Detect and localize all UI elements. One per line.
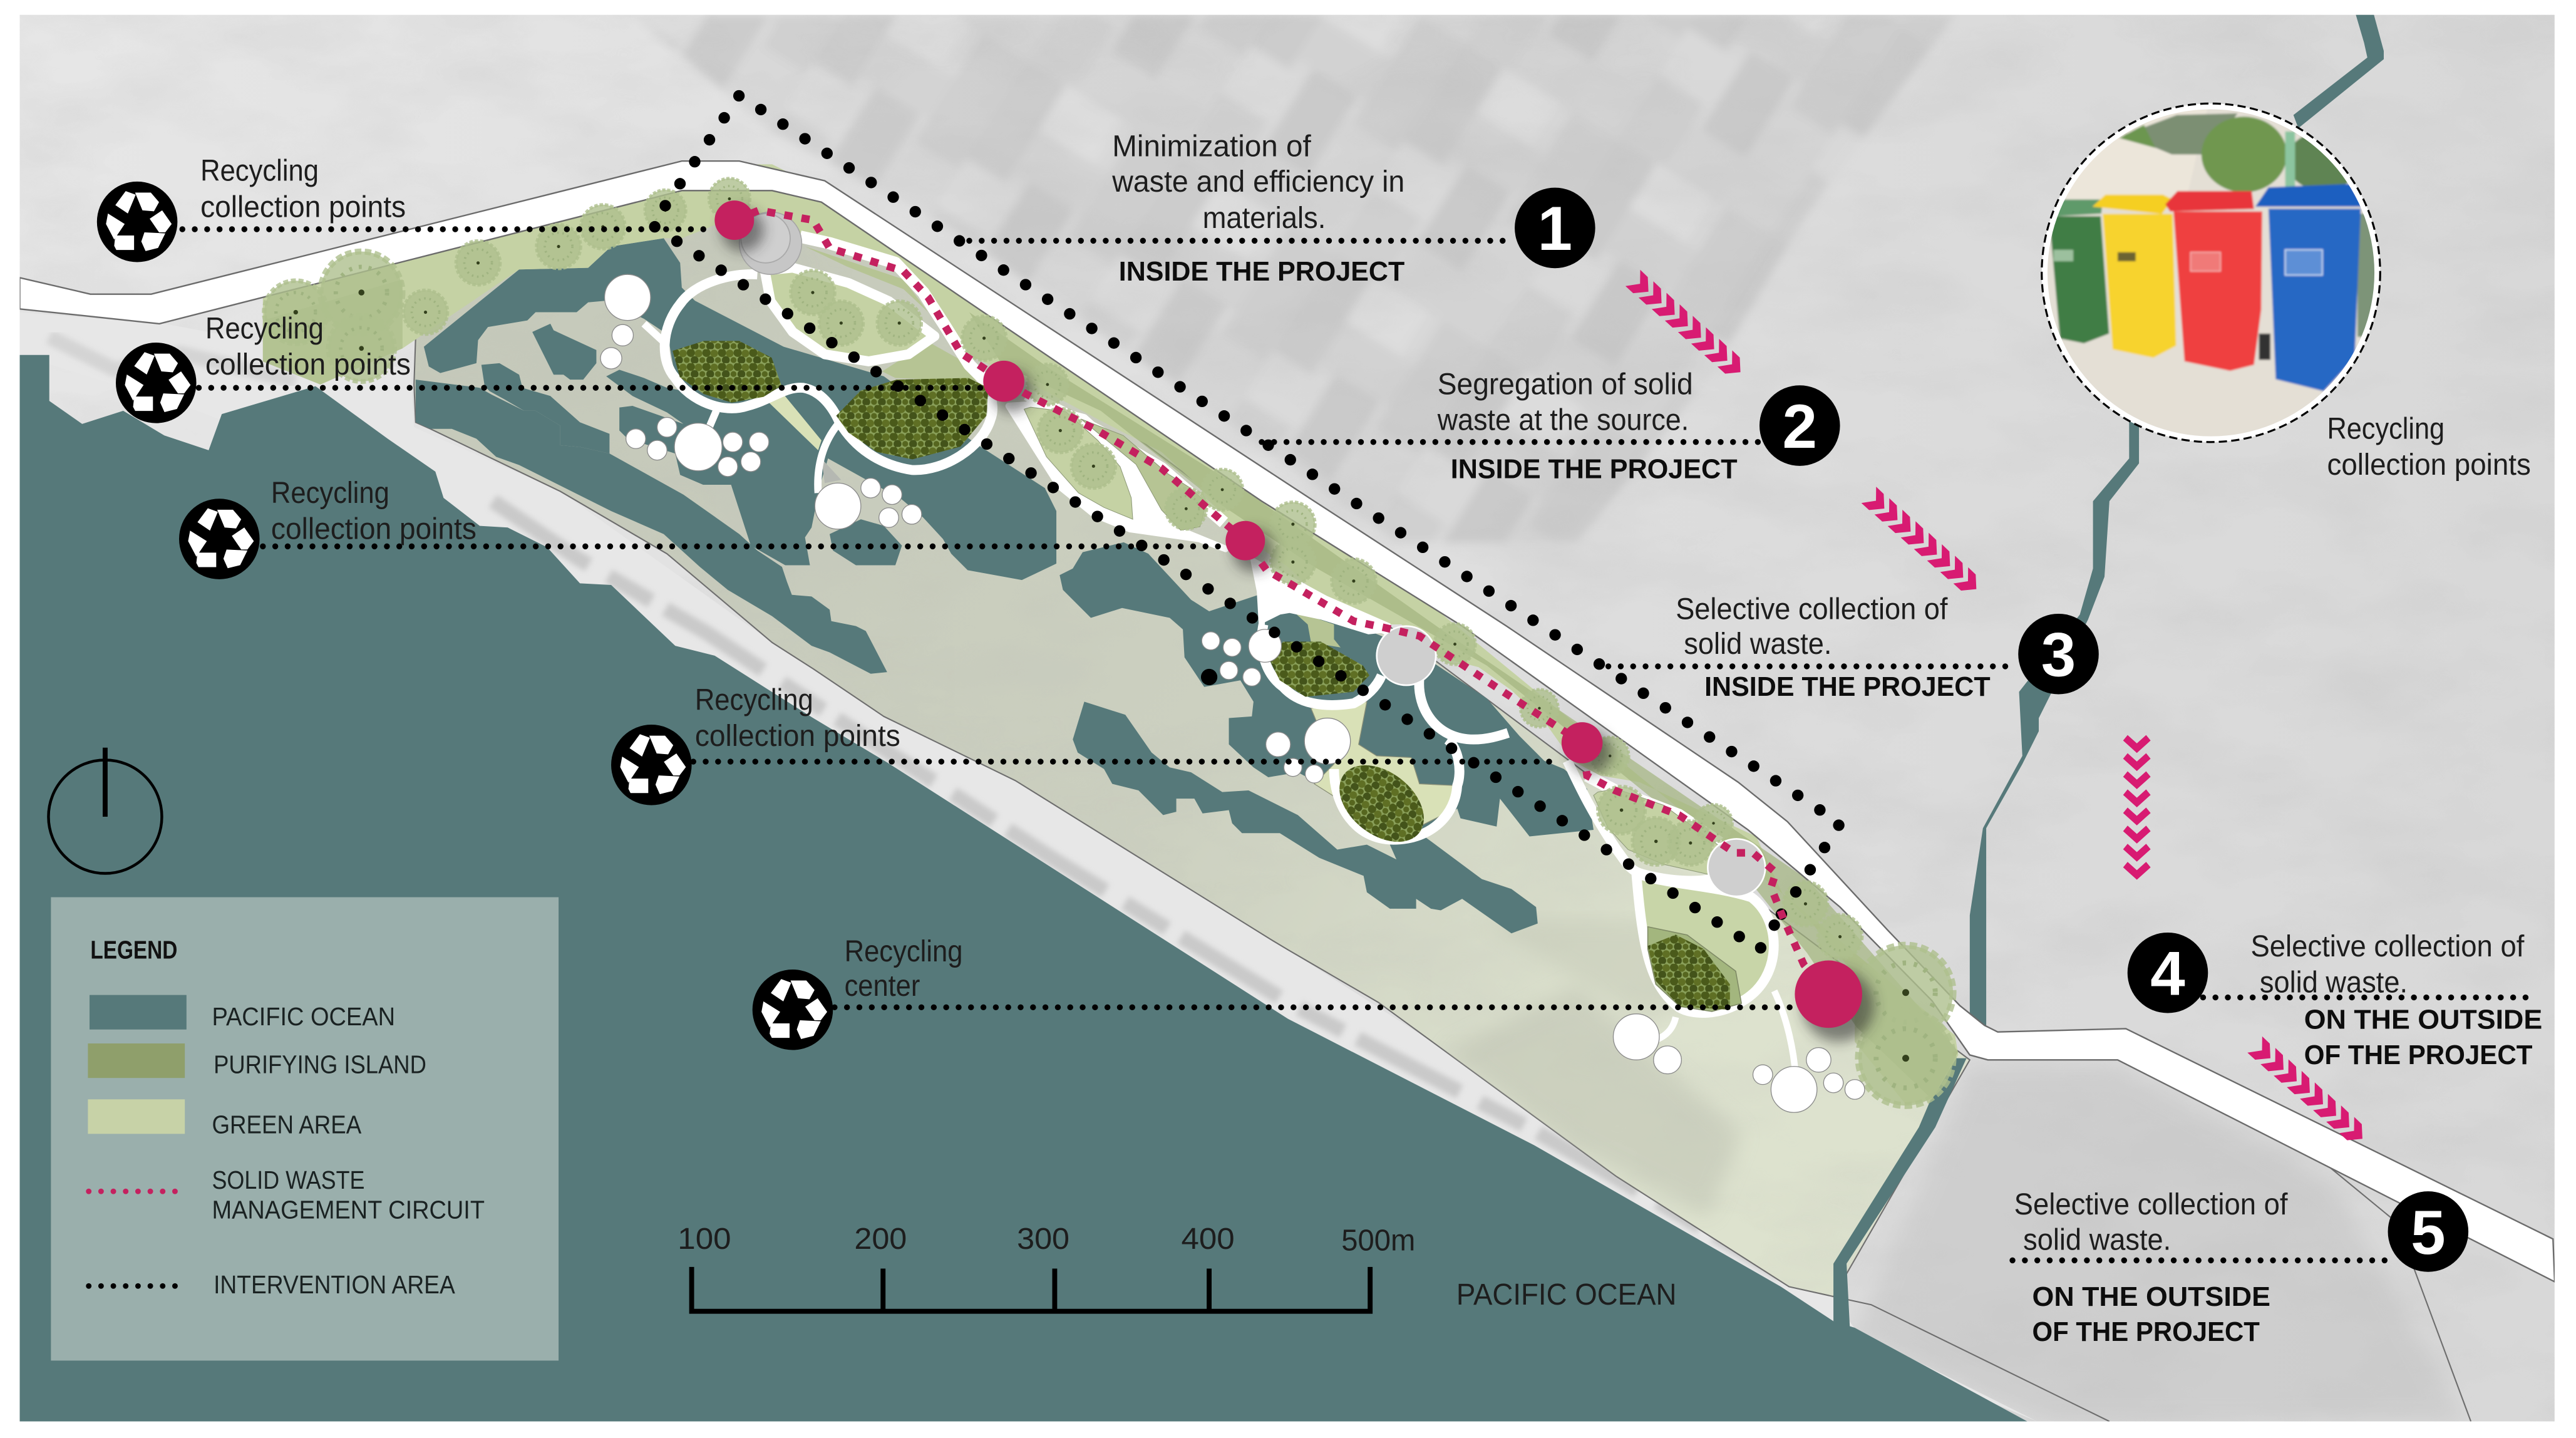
gray plazas (739, 212, 1765, 896)
step 2 badge: 2 (1783, 392, 1817, 462)
step 4 text: Selective collection of (2250, 929, 2525, 963)
scale bar: 400 (1181, 1222, 1235, 1256)
step 3 badge: 3 (2041, 621, 2076, 690)
legend item: purifying island: PURIFYING ISLAND (214, 1050, 426, 1078)
recycling icon 4 (611, 725, 692, 805)
legend item: pacific ocean: PACIFIC OCEAN (212, 1002, 395, 1031)
step 3 badge (2018, 614, 2099, 695)
recycling label 4: collection points (695, 719, 900, 753)
scale bar (677, 1222, 1415, 1311)
legend item: green area: GREEN AREA (212, 1110, 362, 1139)
leaf island one (765, 267, 934, 361)
lagoon: middle (1059, 542, 1594, 840)
leaf island two sliver (1081, 419, 1207, 530)
step 5 scope: ON THE OUTSIDE (2032, 1282, 2270, 1312)
legend item: solid waste circuit: SOLID WASTE (212, 1166, 364, 1194)
step 3 text: Selective collection of (1676, 592, 1948, 626)
white paths and planted leaf islands (644, 237, 1796, 1077)
river channel (1833, 15, 2384, 1328)
white circular plazas (600, 274, 1865, 1112)
small lagoon (830, 519, 902, 566)
node shadows (721, 209, 1875, 1042)
left tree mass shade (263, 279, 403, 385)
leader lines (182, 229, 2528, 1260)
land mass (414, 202, 1970, 1296)
gray ramp (822, 458, 841, 483)
service band under circuit (800, 237, 1720, 843)
lagoon: long tail (1073, 701, 1538, 933)
step 1 text: Minimization of (1112, 129, 1311, 163)
step 2 scope: INSIDE THE PROJECT (1451, 454, 1738, 484)
beach strip (20, 313, 2037, 1422)
photo caption: collection points (2327, 448, 2531, 482)
intervention area dotted boundary (652, 95, 1840, 949)
teardrop inner planting (1648, 927, 1741, 1011)
recycling label 4: Recycling (695, 683, 813, 716)
recycling label 3: Recycling (271, 476, 389, 510)
scale bar: 100 (677, 1222, 731, 1256)
leaf island two planting (1024, 407, 1133, 519)
recycling label 1: collection points (200, 190, 406, 224)
recycling icon 5 (753, 970, 833, 1050)
step 3 scope: INSIDE THE PROJECT (1704, 672, 1991, 702)
step 3 text: solid waste. (1684, 627, 1832, 661)
step 5 text: solid waste. (2023, 1223, 2171, 1257)
step 2 text: Segregation of solid (1438, 368, 1693, 401)
purifying green strip (263, 164, 1958, 1104)
photo caption: Recycling (2327, 412, 2445, 446)
thin site lines (1833, 1162, 2471, 1422)
step 1 badge (1515, 188, 1595, 268)
Pacific ocean (20, 355, 2027, 1422)
step 4 badge: 4 (2150, 939, 2185, 1009)
step 2 text: waste at the source. (1437, 403, 1689, 437)
legend item: solid waste circuit: MANAGEMENT CIRCUIT (212, 1196, 485, 1224)
recycling center label: center (845, 969, 920, 1003)
north arrow (48, 748, 162, 873)
recycling icon 2 (116, 343, 197, 423)
step 5 scope: OF THE PROJECT (2032, 1317, 2260, 1347)
darker strip band (969, 313, 1958, 1099)
step 1 scope: INSIDE THE PROJECT (1119, 257, 1404, 287)
step 2 badge (1759, 385, 1840, 466)
canopy trees (264, 178, 1953, 1105)
chevron arrow 4 to 5 (2247, 1037, 2362, 1141)
recycling label 3: collection points (271, 512, 477, 546)
step 4 scope: ON THE OUTSIDE (2304, 1005, 2542, 1035)
scale bar: 200 (854, 1222, 907, 1256)
ocean label: PACIFIC OCEAN (1456, 1278, 1677, 1311)
scale bar: 500m (1341, 1224, 1415, 1258)
recycling icon 1 (97, 182, 177, 262)
lagoon: lower band (416, 380, 887, 674)
recycling label 2: Recycling (205, 311, 324, 345)
legend item: intervention area: INTERVENTION AREA (214, 1270, 456, 1299)
step 4 badge (2128, 933, 2208, 1013)
chevron arrow 1 to 2 (1625, 270, 1741, 374)
lagoon: main with ring interior and central arms (424, 238, 1056, 580)
step 5 badge (2388, 1191, 2468, 1272)
legend panel (51, 897, 559, 1360)
land texture (1445, 922, 1739, 1213)
teardrop island (1636, 872, 1774, 1013)
lagoon inlet (482, 363, 609, 453)
recycling center label: Recycling (845, 934, 963, 968)
step 5 badge: 5 (2411, 1198, 2446, 1268)
step 1 badge: 1 (1538, 194, 1572, 264)
tree groves (672, 341, 1730, 1010)
link to circle plazas (644, 324, 840, 493)
ring around first grove (665, 274, 992, 470)
olive slivers (805, 247, 1341, 648)
step 5 text: Selective collection of (2014, 1187, 2288, 1221)
recycling icon 3 (179, 499, 260, 579)
lagoon inlet (532, 324, 596, 380)
junction wedge (1252, 559, 1388, 649)
leaf island three planting (1594, 789, 1720, 874)
photo: recycling bins (2037, 98, 2391, 452)
recycling label 2: collection points (205, 348, 411, 381)
recycling label 1: Recycling (200, 154, 319, 188)
chevron arrow 2 to 3 (1862, 487, 1976, 591)
legend item: pacific ocean (90, 995, 395, 1031)
step 4 scope: OF THE PROJECT (2304, 1040, 2532, 1070)
black marker dot (1201, 669, 1217, 685)
legend title: LEGEND (90, 936, 177, 965)
green area patches (767, 395, 1456, 840)
legend item: solid waste circuit (89, 1166, 485, 1224)
connector to big circle (1649, 991, 1796, 1077)
legend item: purifying island (88, 1043, 426, 1078)
ring around second grove (1262, 624, 1382, 705)
legend item: green area (88, 1099, 362, 1139)
outer path around leaf three (1567, 761, 1712, 881)
road (20, 161, 2555, 1281)
scale bar: 300 (1017, 1222, 1069, 1256)
step 4 text: solid waste. (2260, 966, 2408, 1000)
chevron arrow 3 to 4 (2125, 738, 2148, 875)
collection nodes (714, 200, 1862, 1028)
white wedge around leaf island two (1009, 404, 1225, 549)
solid waste management circuit (734, 210, 1828, 994)
step 1 text: materials. (1203, 201, 1326, 235)
step 1 text: waste and efficiency in (1111, 165, 1404, 199)
ring around third grove (1334, 677, 1508, 840)
